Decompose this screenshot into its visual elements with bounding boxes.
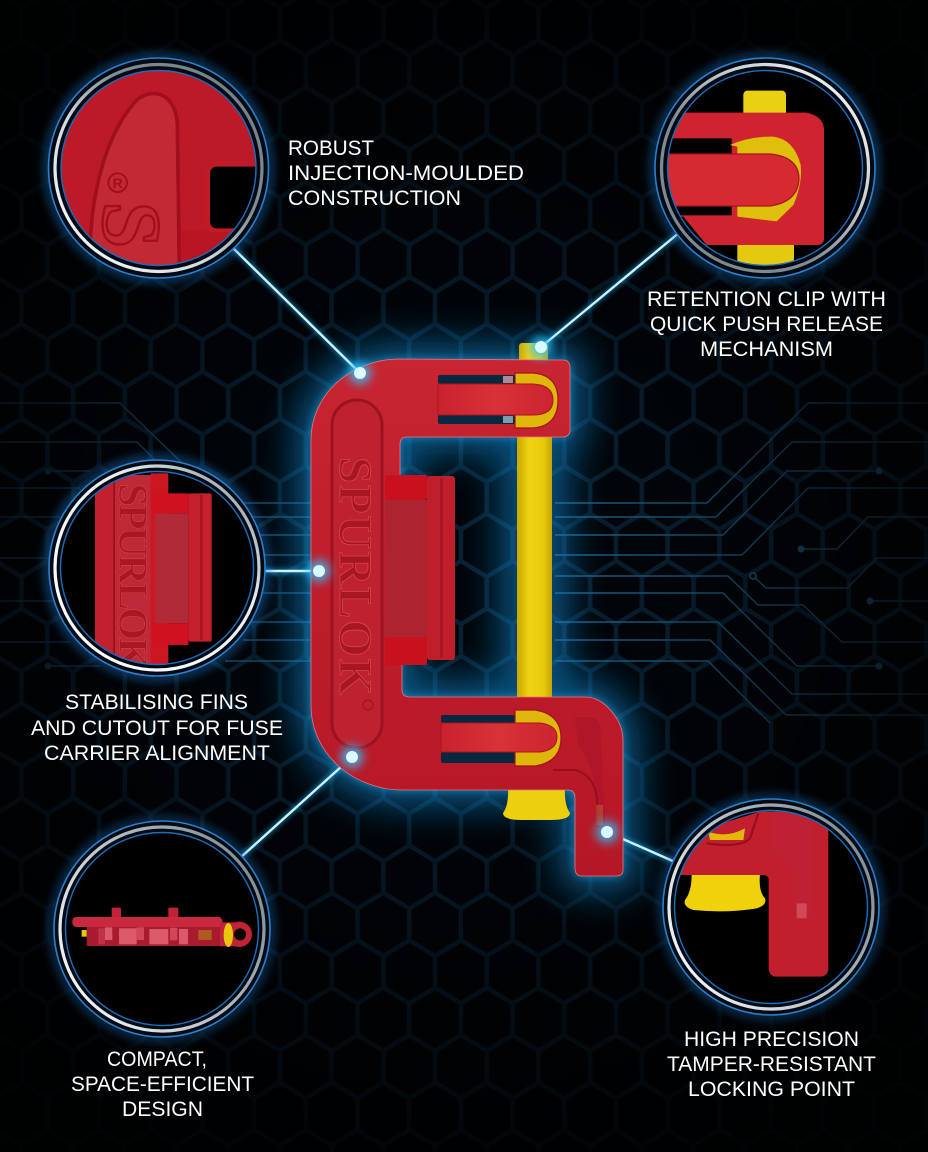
text block: stabilising fins: AND CUTOUT FOR FUSE xyxy=(31,717,283,740)
text block: robust construction: CONSTRUCTION xyxy=(288,187,461,210)
circuit traces: right side xyxy=(555,403,928,723)
bottom locking arm xyxy=(441,710,605,825)
circuit traces: left side xyxy=(0,403,312,670)
panel: injection-moulded detail circle xyxy=(40,50,285,290)
detail photo: textured red logo surface: R xyxy=(113,175,123,191)
blue glow behind clamp xyxy=(311,359,623,876)
detail photo: fins and lettering xyxy=(95,473,212,673)
panel: retention clip detail circle xyxy=(654,57,876,279)
detail photo: textured red logo surface: S xyxy=(84,202,176,248)
detail photo: clip with yellow pin xyxy=(663,91,824,268)
top retention arm xyxy=(438,373,558,428)
text block: stabilising fins: CARRIER ALIGNMENT xyxy=(44,742,270,765)
text block: locking point xyxy=(667,1028,876,1101)
panel: locking point detail circle xyxy=(662,798,880,1016)
panel: stabilising fins detail circle xyxy=(48,459,266,677)
text block: locking point: TAMPER-RESISTANT xyxy=(667,1053,876,1076)
detail photo: locking hook xyxy=(680,812,828,977)
text block: robust construction xyxy=(288,137,524,210)
logo recess with SPURLOK lettering xyxy=(329,400,382,748)
text block: stabilising fins: STABILISING FINS xyxy=(65,691,248,714)
text block: compact design xyxy=(71,1048,254,1121)
text block: robust construction: INJECTION-MOULDED xyxy=(288,162,524,185)
yellow pin xyxy=(503,343,570,820)
logo recess with SPURLOK lettering: SPURLOK xyxy=(329,457,381,695)
text block: compact design: COMPACT, xyxy=(107,1048,207,1071)
text block: retention clip: RETENTION CLIP WITH xyxy=(647,288,886,311)
text block: robust construction: ROBUST xyxy=(288,137,374,160)
anchor dots xyxy=(308,336,618,843)
clamp body xyxy=(311,359,623,876)
main product: Spurlok clamp xyxy=(311,343,623,876)
connector lines xyxy=(232,232,680,862)
text block: locking point: LOCKING POINT xyxy=(688,1078,855,1101)
panel: compact design detail circle xyxy=(53,820,271,1038)
text block: stabilising fins xyxy=(31,691,283,765)
text block: retention clip xyxy=(647,288,886,361)
text block: retention clip: MECHANISM xyxy=(700,338,833,361)
text block: compact design: SPACE-EFFICIENT xyxy=(71,1073,254,1096)
text block: locking point: HIGH PRECISION xyxy=(684,1028,859,1051)
stabilising fins and plate xyxy=(385,475,455,665)
detail photo: clamp side view xyxy=(72,908,252,947)
text block: compact design: DESIGN xyxy=(122,1098,203,1121)
detail photo: fins and lettering: SPURLOK xyxy=(109,483,155,671)
detail photo: textured red logo surface xyxy=(62,71,256,265)
text block: retention clip: QUICK PUSH RELEASE xyxy=(650,313,883,336)
